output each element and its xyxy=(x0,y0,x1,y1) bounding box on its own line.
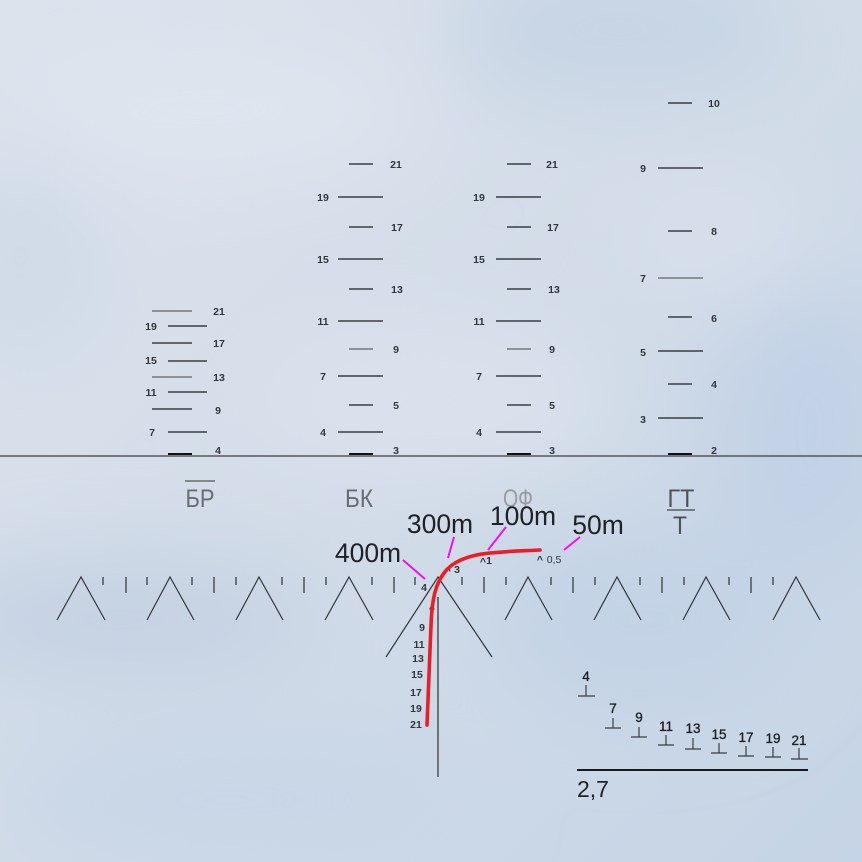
scale: ОФ: 17 xyxy=(547,222,559,234)
central vertical line xyxy=(437,597,439,777)
range marks along trajectory: 13 xyxy=(412,653,424,665)
scale: ГТ/Т: 3 xyxy=(640,414,646,426)
range table: 13 xyxy=(685,721,701,736)
ammo label: БК: БК xyxy=(345,485,373,513)
scale: БР: 4 xyxy=(215,445,221,457)
scale: ГТ/Т: 9 xyxy=(640,163,646,175)
scale: ОФ: 11 xyxy=(473,316,485,328)
scale: БР: 17 xyxy=(213,338,225,350)
scale: БР: 13 xyxy=(213,372,225,384)
scale: ОФ xyxy=(473,159,560,457)
range marks along trajectory: 11 xyxy=(413,639,425,651)
callout: 300m: 300m xyxy=(407,509,473,539)
scale: БР: 9 xyxy=(215,405,221,417)
range marks along trajectory: 4 xyxy=(421,582,427,594)
scale: ГТ/Т: 5 xyxy=(640,347,646,359)
range table: 17 xyxy=(738,730,754,745)
scale: ГТ/Т: 8 xyxy=(711,226,717,238)
range marks along trajectory: 3 xyxy=(454,564,460,576)
scale: ОФ: 3 xyxy=(549,445,555,457)
range table: 11 xyxy=(659,719,673,734)
range marks along trajectory: ^ xyxy=(537,554,543,566)
scale: ГТ/Т: 10 xyxy=(708,98,720,110)
callout: 400m: 400m xyxy=(335,538,401,568)
ammo label: ОФ: ОФ xyxy=(503,485,533,513)
range marks along trajectory: 9 xyxy=(419,622,425,634)
scale: БК: 17 xyxy=(391,222,403,234)
scale: ГТ/Т: 6 xyxy=(711,313,717,325)
scale: БР: 21 xyxy=(213,306,225,318)
scale: БК: 4 xyxy=(320,427,326,439)
range table: 9 xyxy=(635,710,643,725)
range table: 2,7 xyxy=(577,776,609,802)
range marks along trajectory: 15 xyxy=(411,669,423,681)
scale: БК: 9 xyxy=(393,344,399,356)
ammo label: БР: БР xyxy=(186,485,214,513)
range marks along trajectory: 1 xyxy=(486,555,492,567)
scale: ОФ: 13 xyxy=(548,284,560,296)
scale: ОФ: 4 xyxy=(476,427,482,439)
range table: 4 xyxy=(582,669,590,684)
callout: 100m: 100m xyxy=(490,501,556,531)
callout: 100m xyxy=(488,501,556,550)
scale: ГТ/Т: 4 xyxy=(711,379,717,391)
scale: БК: 5 xyxy=(393,400,399,412)
ammo label: ГТ over Т: Т xyxy=(673,512,687,540)
range table: 19 xyxy=(765,731,781,746)
callout: 50m: 50m xyxy=(572,510,624,540)
range table: 7 xyxy=(609,701,617,716)
callout: 50m xyxy=(564,510,624,550)
scale: БР xyxy=(145,306,225,457)
scale: ОФ: 7 xyxy=(476,371,482,383)
scale: ГТ/Т: 2 xyxy=(711,445,717,457)
range table xyxy=(577,669,808,802)
range marks along trajectory xyxy=(410,554,561,731)
reticle ticks xyxy=(103,577,773,593)
range marks along trajectory: ^ xyxy=(429,603,435,615)
range table: 21 xyxy=(791,733,807,748)
callout: 400m xyxy=(335,538,425,579)
scale: БР: 15 xyxy=(145,355,157,367)
trajectory curve xyxy=(427,550,540,725)
scale: БК: 21 xyxy=(390,159,402,171)
scale: БК: 15 xyxy=(317,254,329,266)
range marks along trajectory: 21 xyxy=(410,719,422,731)
scale: БК: 7 xyxy=(320,371,326,383)
range marks along trajectory: 0,5 xyxy=(547,554,561,566)
ammo label: ГТ over Т xyxy=(667,485,695,540)
scale: ОФ: 5 xyxy=(549,400,555,412)
reticle chevrons xyxy=(57,577,820,657)
ammo label: ГТ over Т: ГТ xyxy=(668,485,694,513)
range marks along trajectory: 17 xyxy=(410,687,422,699)
scale: ОФ: 15 xyxy=(473,254,485,266)
scale: БК: 19 xyxy=(317,192,329,204)
scale: БР: 19 xyxy=(145,321,157,333)
scale: БК xyxy=(317,159,403,457)
scale: ГТ/Т xyxy=(640,98,720,457)
scale: ОФ: 9 xyxy=(549,344,555,356)
range table: 15 xyxy=(711,727,727,742)
scale: БК: 11 xyxy=(317,316,329,328)
scale: БР: 11 xyxy=(145,387,157,399)
callout: 300m xyxy=(407,509,473,558)
range marks along trajectory: ^ xyxy=(480,556,486,568)
range marks along trajectory: 19 xyxy=(410,703,422,715)
scale: БК: 3 xyxy=(393,445,399,457)
scale: ОФ: 21 xyxy=(546,159,558,171)
scale: БК: 13 xyxy=(391,284,403,296)
range marks along trajectory: ^ xyxy=(445,565,451,577)
scale: ГТ/Т: 7 xyxy=(640,273,646,285)
horizon line xyxy=(0,455,862,457)
scale: БР: 7 xyxy=(149,427,155,439)
scale: ОФ: 19 xyxy=(473,192,485,204)
